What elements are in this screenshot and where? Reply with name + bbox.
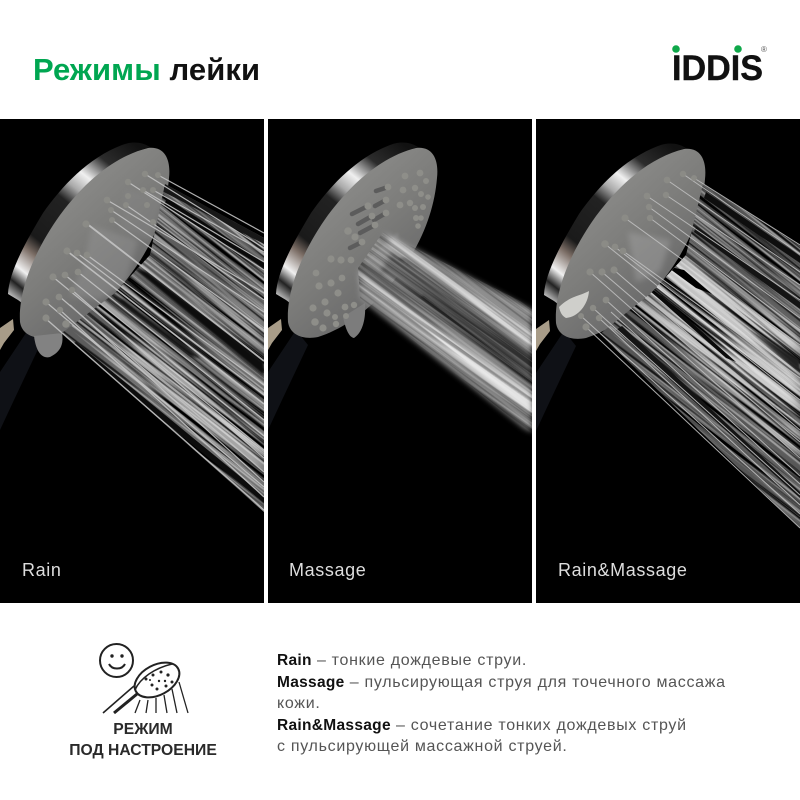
icon: shower head <box>0 143 169 430</box>
text block: mode descriptions <box>277 652 726 755</box>
title: Режимы лейки <box>33 52 260 87</box>
label: massage: Massage <box>289 560 366 580</box>
rain jets <box>42 171 264 512</box>
icon: shower head <box>268 143 437 430</box>
panel: rain <box>0 119 264 603</box>
text block: mode descriptions: Rain&Massage – сочетание тонких дождевых струй <box>277 716 687 734</box>
logo: iddis: ® <box>761 45 767 54</box>
label: rain: Rain <box>22 560 62 580</box>
icon: smiley and shower head <box>99 643 189 714</box>
label: rain and massage: Rain&Massage <box>558 560 688 580</box>
panel: rain and massage <box>536 119 800 603</box>
text block: mode descriptions: Massage – пульсирующая струя для точечного массажа <box>277 674 726 690</box>
massage jets <box>356 232 532 434</box>
text block: mode descriptions: кожи. <box>277 695 320 712</box>
text block: mode descriptions: Rain – тонкие дождевые струи. <box>277 652 527 669</box>
icon: shower head <box>536 144 705 431</box>
text block: mode descriptions: с пульсирующей массажной струей. <box>277 738 568 755</box>
caption: mode for mood: РЕЖИМ <box>113 721 173 738</box>
combined jets <box>578 171 800 528</box>
panel: massage <box>268 119 532 603</box>
caption: mode for mood <box>69 721 217 759</box>
caption: mode for mood: ПОД НАСТРОЕНИЕ <box>69 742 217 759</box>
